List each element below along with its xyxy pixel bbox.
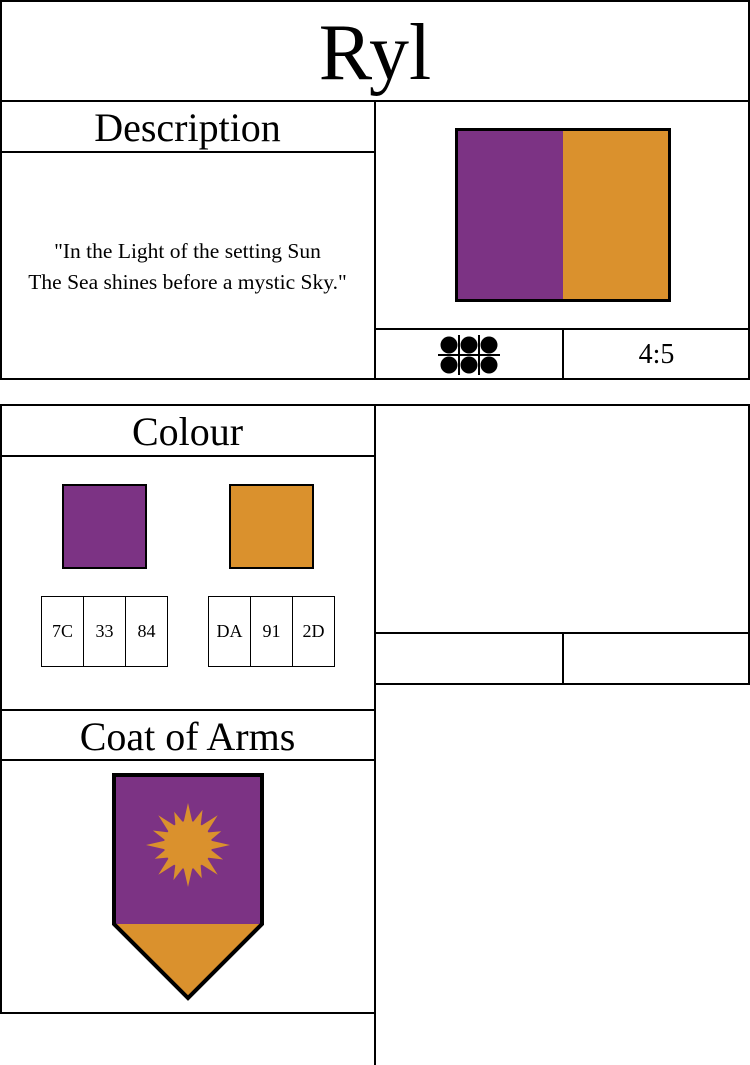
title: Ryl (319, 9, 431, 97)
heading: coat of arms: Coat of Arms (80, 714, 295, 759)
flag (455, 128, 671, 302)
hex orange: DA (216, 621, 242, 641)
description text: "In the Light of the setting Sun (54, 239, 321, 263)
swatch purple (62, 484, 147, 569)
heading: colour: Colour (132, 409, 243, 454)
hex orange: 91 (262, 621, 280, 641)
hex purple: 7C (52, 621, 73, 641)
ratio: 4:5 (639, 339, 674, 370)
hex orange (208, 596, 335, 667)
swatch orange (229, 484, 314, 569)
heading: description: Description (94, 105, 281, 150)
description text: The Sea shines before a mystic Sky." (28, 270, 347, 294)
hex purple (41, 596, 168, 667)
hex purple: 33 (96, 621, 114, 641)
hex purple: 84 (138, 621, 156, 641)
icon: sun (146, 803, 230, 887)
icon: six dots (438, 335, 500, 375)
coat of arms shield (112, 773, 264, 1001)
description text (28, 239, 347, 294)
hex orange: 2D (302, 621, 324, 641)
